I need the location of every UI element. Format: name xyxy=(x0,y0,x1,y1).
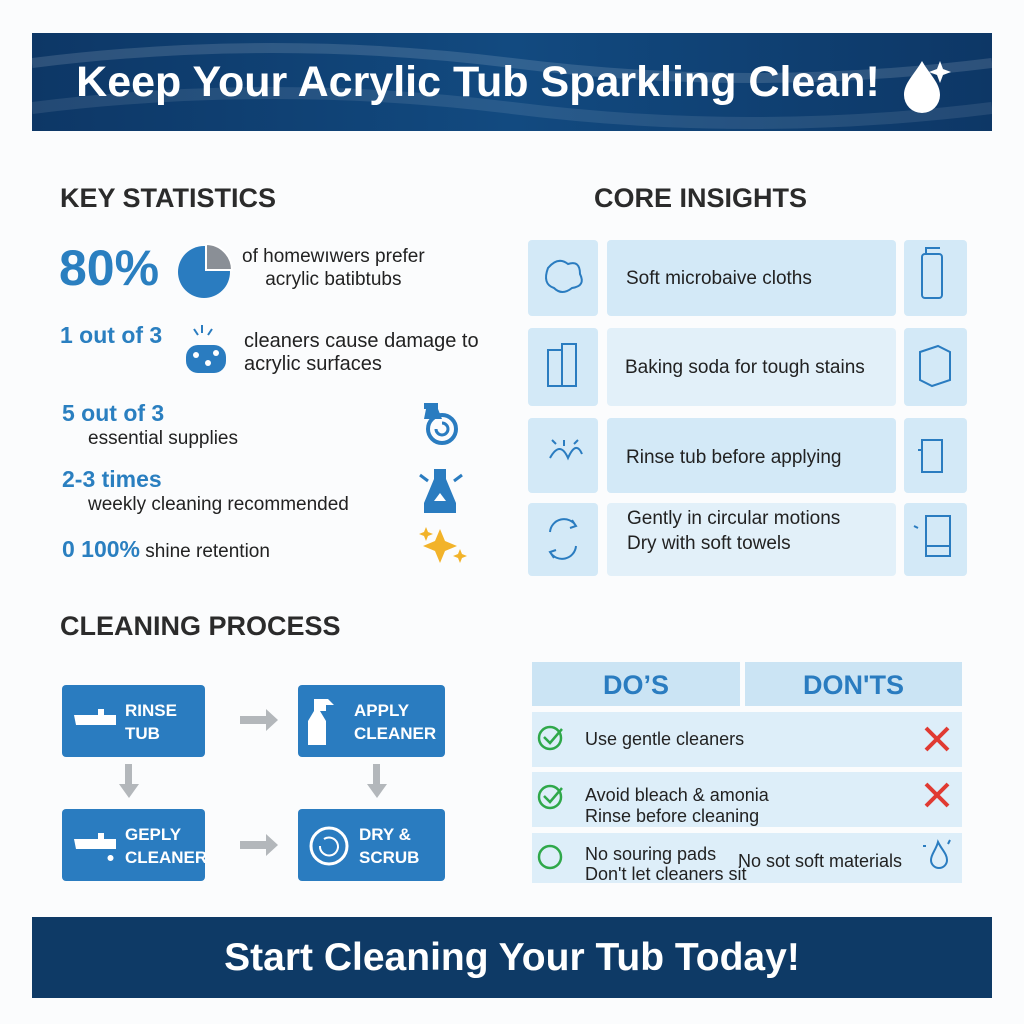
table: do's and don'ts: Don't let cleaners sit xyxy=(585,864,747,884)
stats block: of homewıwers prefer xyxy=(242,246,425,267)
panel: core insights: Baking soda for tough stains xyxy=(625,357,865,378)
panel: core insights: Soft microbaive cloths xyxy=(626,268,812,289)
step: apply cleaner: CLEANER xyxy=(354,724,436,743)
icon: bottle xyxy=(419,469,463,513)
flow: cleaning process xyxy=(62,685,445,881)
heading: cleaning process: CLEANING PROCESS xyxy=(60,611,341,641)
table: do's and don'ts: Avoid bleach & amonia xyxy=(585,785,769,805)
heading: core insights: CORE INSIGHTS xyxy=(594,183,807,213)
icon: sparkles xyxy=(419,527,467,563)
table: do's and don'ts: Rinse before cleaning xyxy=(585,806,759,826)
footer banner xyxy=(32,917,992,998)
step: apply cleaner: APPLY xyxy=(354,701,409,720)
panel: core insights: Gently in circular motions xyxy=(627,508,840,529)
table: do's and don'ts: DON'TS xyxy=(803,670,904,700)
table: do's and don'ts: No sot soft materials xyxy=(738,851,902,871)
stats block: acrylic surfaces xyxy=(244,353,382,375)
stats block xyxy=(59,240,479,563)
step: apply cleaner xyxy=(298,685,445,757)
stats block: 2-3 times xyxy=(62,466,162,492)
table: do's and don'ts: DO’S xyxy=(603,670,669,700)
stats block: weekly cleaning recommended xyxy=(88,494,349,515)
step: rinse tub: RINSE xyxy=(125,701,177,720)
step: dry & scrub xyxy=(298,809,445,881)
arrows xyxy=(119,709,387,856)
icon: pie chart xyxy=(178,245,231,298)
stats block: essential supplies xyxy=(88,428,238,449)
step: geply cleaner: GEPLY xyxy=(125,825,181,844)
panel: core insights: Dry with soft towels xyxy=(627,533,791,554)
stats block: cleaners cause damage to xyxy=(244,330,479,352)
step: dry & scrub: DRY & xyxy=(359,825,411,844)
step: dry & scrub: SCRUB xyxy=(359,848,419,867)
table: do's and don'ts: No souring pads xyxy=(585,844,716,864)
stats block: 5 out of 3 xyxy=(62,400,164,426)
title: Keep Your Acrylic Tub Sparkling Clean! xyxy=(76,58,880,106)
heading: key statistics: KEY STATISTICS xyxy=(60,183,276,213)
step: geply cleaner: CLEANER xyxy=(125,848,207,867)
stats block: acrylic batibtubs xyxy=(265,269,401,290)
table: do's and don'ts: Use gentle cleaners xyxy=(585,729,744,749)
stats block: 80% xyxy=(59,240,159,296)
step: rinse tub xyxy=(62,685,205,757)
panel: core insights xyxy=(528,240,967,576)
table: do's and don'ts xyxy=(532,662,962,884)
header banner xyxy=(32,33,992,131)
icon: water drop xyxy=(904,61,951,113)
stats block: 1 out of 3 xyxy=(60,322,162,348)
stats block: 0 100% shine retention xyxy=(62,536,270,562)
step: rinse tub: TUB xyxy=(125,724,160,743)
icon: sponge xyxy=(186,325,226,373)
footer banner: Start Cleaning Your Tub Today! xyxy=(224,936,800,979)
panel: core insights: Rinse tub before applying xyxy=(626,447,841,468)
icon: spray with cycle xyxy=(424,403,458,445)
step: geply cleaner xyxy=(62,809,205,881)
